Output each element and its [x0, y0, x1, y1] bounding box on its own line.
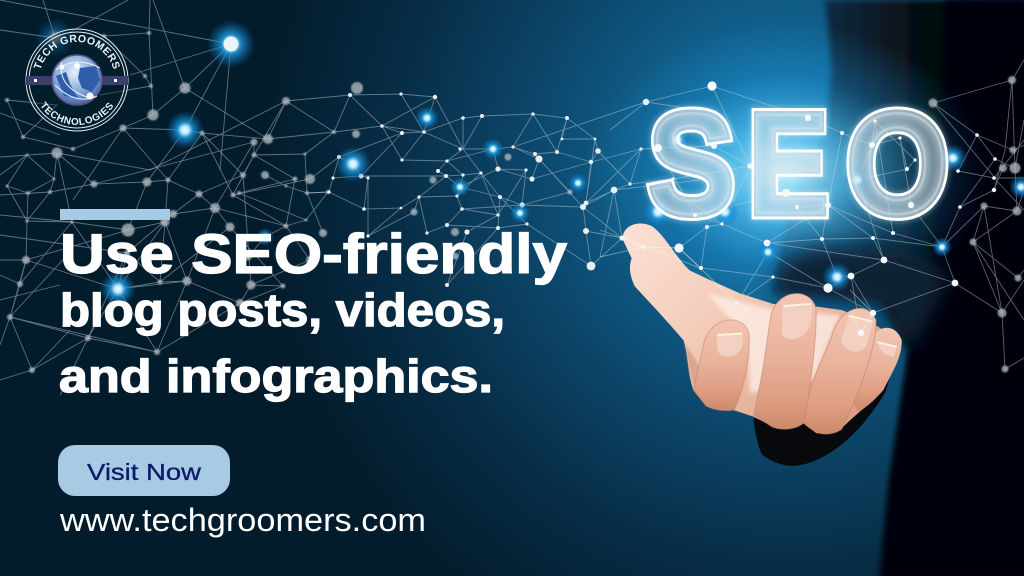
letter fills: [648, 82, 949, 245]
index finger: [693, 320, 749, 411]
logo rings: [26, 29, 128, 131]
glowing blue network nodes: [35, 18, 1024, 307]
dark suit arm below glow: [771, 250, 950, 350]
letter glow: E: [748, 82, 829, 245]
button: Visit Now: [58, 445, 230, 496]
button: Visit Now: Visit Now: [87, 459, 201, 485]
headline: [59, 222, 567, 402]
suit body silhouette: [773, 0, 1024, 576]
letter fills: E: [748, 82, 829, 245]
glow behind SEO: [585, 22, 985, 322]
letter outlines: O: [846, 82, 949, 245]
headline line 2: blog posts, videos,: [60, 284, 505, 336]
palm highlight: [707, 293, 840, 393]
fingernails: [717, 306, 897, 357]
letter outlines: S: [648, 82, 735, 245]
wrist shadow: [685, 343, 710, 405]
website url: www.techgroomers.com: [59, 502, 426, 538]
letter outlines: E: [748, 82, 829, 245]
letter outlines: [646, 106, 948, 221]
sleeve cuff: [753, 353, 897, 466]
logo globe: [52, 55, 102, 105]
letter fills: S: [648, 82, 735, 245]
logo text bottom: TECHNOLOGIES: [41, 101, 113, 125]
letter glow: [648, 82, 949, 245]
logo text top: TECH GROOMERS: [33, 34, 120, 69]
network nodes over lettering: [621, 81, 997, 336]
ring finger: [802, 308, 876, 434]
lines over hand: [600, 238, 873, 333]
network nodes: [5, 31, 1022, 373]
small finger: [848, 328, 902, 412]
letter fills: O: [846, 82, 949, 245]
headline line 3: and infographics.: [59, 350, 493, 402]
SEO lettering: [642, 102, 953, 226]
network lines: [0, 0, 1024, 395]
logo band: [26, 76, 128, 85]
middle finger: [754, 294, 816, 429]
letter glow: O: [846, 82, 949, 245]
headline line 1: Use SEO-friendly: [60, 222, 567, 285]
nail tips: [718, 304, 896, 347]
palm and thumb: [623, 223, 900, 433]
accent bar: [60, 209, 170, 220]
logo: Tech Groomers Technologies: [26, 28, 128, 132]
letter glow: S: [648, 82, 735, 245]
hand: [623, 223, 902, 466]
